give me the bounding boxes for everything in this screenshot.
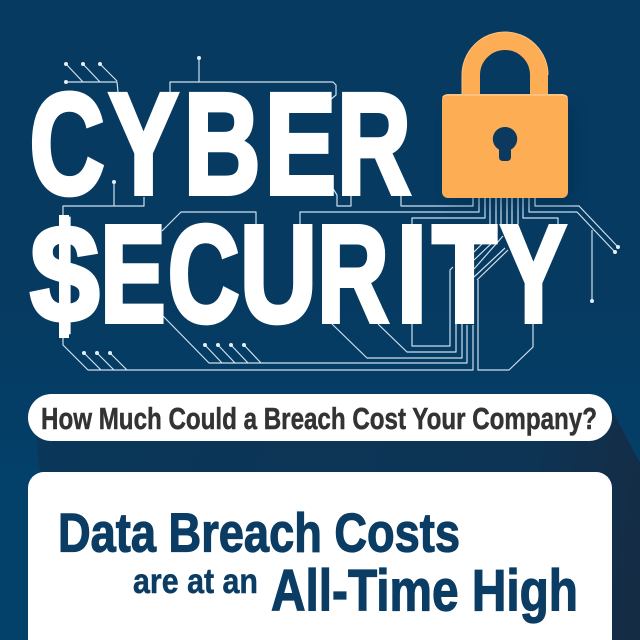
heading line 2 large: All-Time High xyxy=(271,558,578,624)
title: $ECURITY: Y xyxy=(501,198,566,352)
title: $ECURITY: U xyxy=(240,198,317,352)
title: CYBER xyxy=(30,64,411,224)
title: $ECURITY: R xyxy=(317,198,389,352)
heading line 1: Data Breach Costs xyxy=(58,502,460,564)
circuit traces xyxy=(63,58,618,370)
title: CYBER: B xyxy=(184,64,261,224)
circuit nodes xyxy=(64,56,620,355)
title: CYBER: C xyxy=(30,64,105,224)
title: CYBER: E xyxy=(265,64,336,224)
title: $ECURITY xyxy=(30,198,566,352)
heading line 2 small: are at an xyxy=(133,562,258,601)
title: $ECURITY: E xyxy=(100,198,166,352)
long shadow behind pill and panel xyxy=(36,410,640,640)
title: $ECURITY: I xyxy=(397,198,427,352)
title: $ECURITY: T xyxy=(432,198,497,352)
icon: padlock xyxy=(442,32,574,204)
title: CYBER: Y xyxy=(109,64,178,224)
title: CYBER: R xyxy=(337,64,411,224)
title: $ECURITY: C xyxy=(168,198,239,352)
panel: data breach costs xyxy=(28,472,612,640)
title: $ECURITY: $ xyxy=(30,198,99,352)
